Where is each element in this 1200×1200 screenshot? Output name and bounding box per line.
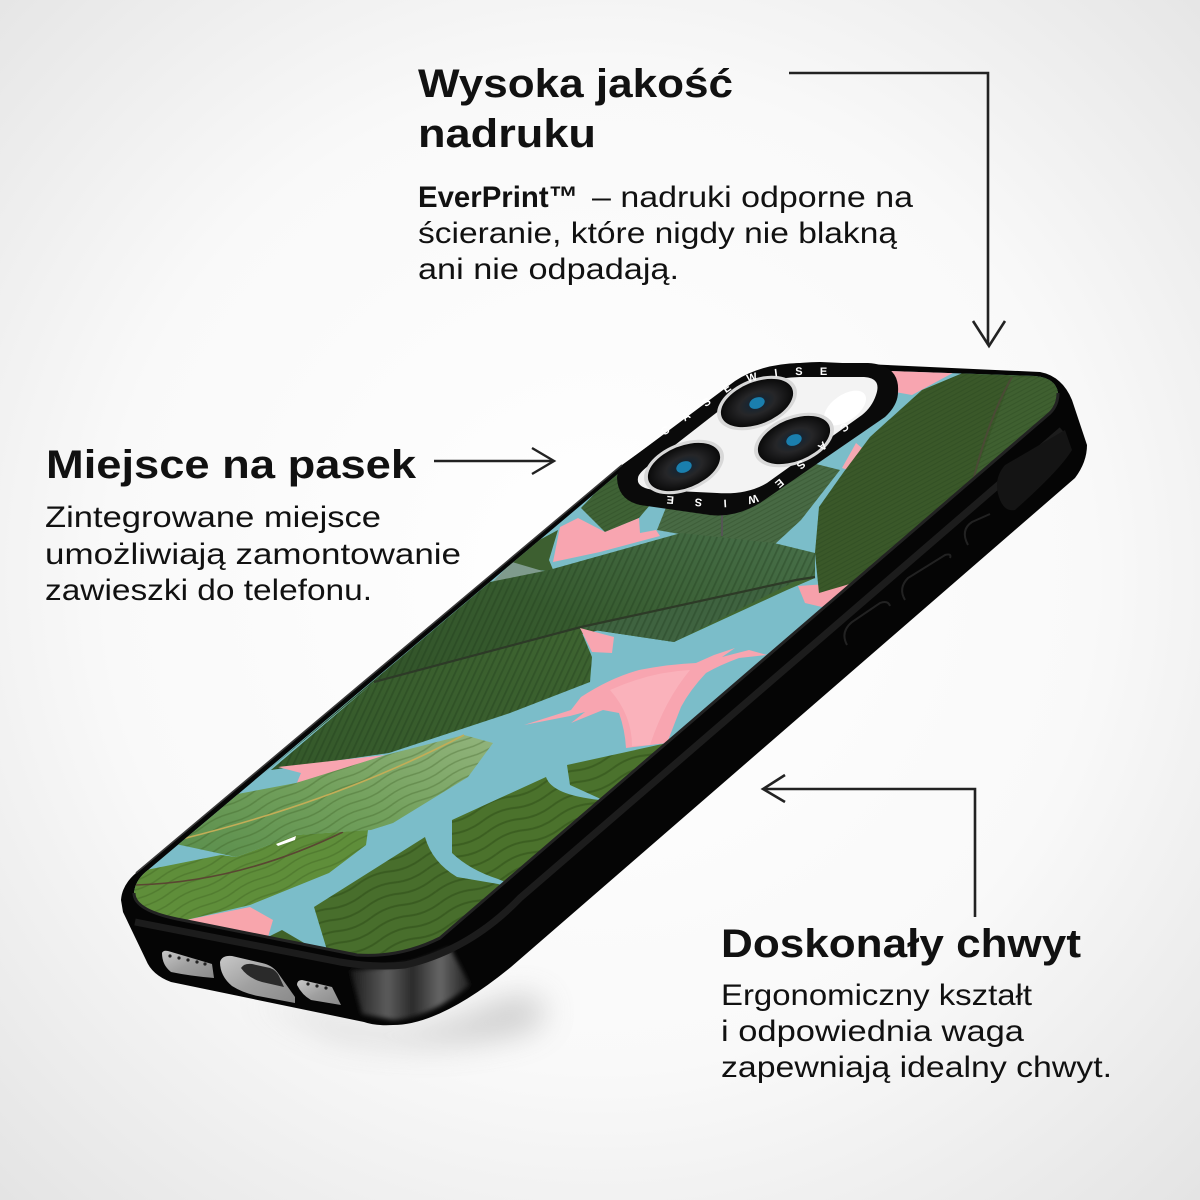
- brand text bottom: CASEWISE: [666, 424, 848, 508]
- heading: Wysoka jakość: [418, 62, 733, 106]
- charging port: [220, 956, 295, 1003]
- body text: ścieranie, które nigdy nie blakną: [418, 217, 897, 250]
- camera island: [617, 363, 898, 516]
- large pink flower: [524, 648, 767, 748]
- pink flower top right: [891, 371, 952, 395]
- body text: Zintegrowane miejsce: [45, 501, 381, 534]
- right lens: [746, 402, 842, 478]
- camera glass: [638, 377, 878, 493]
- stem: [721, 515, 723, 536]
- leaf upper left: [581, 470, 650, 532]
- flash: [818, 384, 872, 432]
- body text: [418, 181, 913, 286]
- callout: print quality: [418, 62, 913, 286]
- callout: strap slot: [45, 443, 461, 607]
- phone shadow: [250, 995, 545, 1044]
- heading: Doskonały chwyt: [721, 922, 1081, 966]
- midrib: [374, 577, 815, 682]
- leaf behind camera: [657, 464, 840, 544]
- side buttons: [844, 514, 990, 645]
- arrow: print quality: [789, 73, 1005, 346]
- right leaf midrib: [974, 377, 1012, 477]
- power button: [844, 602, 890, 645]
- island frame: [617, 363, 898, 516]
- body text: i odpowiednia waga: [721, 1015, 1024, 1048]
- arrow: grip: [763, 775, 975, 917]
- body text: Ergonomiczny kształt: [721, 979, 1033, 1012]
- body text: zapewniają idealny chwyt.: [721, 1051, 1112, 1084]
- sky background: [134, 371, 1058, 948]
- body text: – nadruki odporne na: [592, 181, 913, 214]
- large central leaf: [262, 533, 815, 775]
- body text: EverPrint™: [418, 181, 578, 214]
- small grey leaf: [493, 562, 544, 582]
- heading: [418, 62, 733, 156]
- top lens: [709, 365, 805, 441]
- side rim highlight: [135, 430, 1062, 966]
- body text: [721, 979, 1112, 1084]
- body text: zawieszki do telefonu.: [45, 574, 372, 607]
- pink flower lower: [278, 755, 385, 785]
- back face with printed pattern: [134, 371, 1058, 954]
- pink flower bottom: [186, 907, 273, 937]
- phone in case: [121, 362, 1087, 1026]
- mid green leaf: [130, 830, 368, 920]
- pink flower right: [798, 584, 849, 607]
- heading: nadruku: [418, 112, 596, 156]
- left rim line: [136, 465, 622, 873]
- pink flower mid: [580, 628, 614, 653]
- pink flower near leaf: [842, 443, 862, 470]
- large right leaf: [815, 370, 1062, 593]
- pink flower left: [553, 518, 660, 562]
- right speaker: [297, 980, 341, 1005]
- body text: ani nie odpadają.: [418, 253, 679, 286]
- dark leaf bottom: [314, 837, 500, 954]
- switch recess: [997, 430, 1072, 510]
- small dark leaf: [505, 530, 558, 572]
- arrow: strap slot: [434, 448, 554, 474]
- body text: [45, 501, 461, 607]
- light green leaf: [171, 735, 493, 857]
- volume button: [902, 554, 950, 600]
- body text: umożliwiają zamontowanie: [45, 538, 461, 571]
- flower highlight: [610, 670, 690, 746]
- brown vein: [136, 832, 343, 885]
- dark leaf middle: [452, 777, 598, 882]
- heading: Miejsce na pasek: [46, 443, 417, 487]
- small leaf bottom: [270, 930, 304, 943]
- brand text top: CASEWISE: [664, 367, 827, 434]
- left speaker: [162, 951, 214, 978]
- case body: [121, 362, 1087, 1025]
- face rim: [134, 393, 1058, 955]
- second button: [965, 514, 990, 545]
- dark leaf right: [567, 744, 664, 798]
- left lens: [636, 429, 732, 505]
- yellow vein: [182, 735, 464, 839]
- corner highlight: [350, 948, 470, 1020]
- white nick: [276, 836, 296, 846]
- callout: grip: [721, 922, 1112, 1084]
